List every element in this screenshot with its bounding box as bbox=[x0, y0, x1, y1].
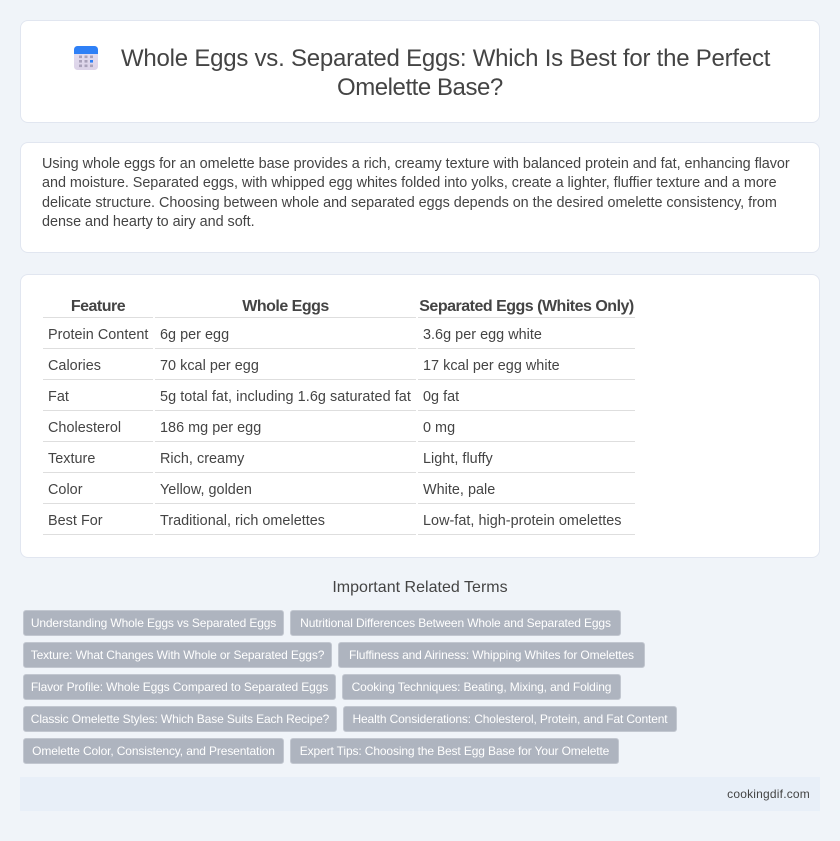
table row: color: White, pale bbox=[423, 482, 495, 498]
title bbox=[121, 45, 770, 101]
panel: header bbox=[20, 20, 820, 123]
table row: fat: Fat bbox=[48, 389, 69, 405]
title: Omelette Base? bbox=[337, 74, 503, 101]
text block: intro paragraph: Using whole eggs for an omelette base provides a rich, creamy texture with balanced protein and fat, enhancing flavor bbox=[42, 156, 790, 172]
table row: fat: 5g total fat, including 1.6g saturated fat bbox=[160, 389, 411, 405]
table row: calories bbox=[48, 358, 560, 374]
tag bbox=[23, 674, 336, 700]
table row: calories: 70 kcal per egg bbox=[160, 358, 259, 374]
tag: Expert Tips: Choosing the Best Egg Base for Your Omelette bbox=[300, 744, 609, 758]
title: Whole Eggs vs. Separated Eggs: Which Is Best for the Perfect bbox=[121, 45, 770, 72]
icon: calendar bbox=[74, 46, 98, 70]
table row: texture: Texture bbox=[48, 451, 95, 467]
table row: protein content bbox=[48, 327, 542, 343]
table row: color bbox=[48, 482, 495, 498]
table row: best for: Traditional, rich omelettes bbox=[160, 513, 325, 529]
table row: texture: Rich, creamy bbox=[160, 451, 244, 467]
text block: intro paragraph: delicate structure. Choosing between whole and separated eggs depends on the desired omelette consistency, from bbox=[42, 195, 777, 211]
table header: whole eggs: Whole Eggs bbox=[242, 298, 329, 315]
table row: cholesterol: Cholesterol bbox=[48, 420, 121, 436]
table row: cholesterol bbox=[48, 420, 455, 436]
table row: fat bbox=[48, 389, 460, 405]
table row: best for: Best For bbox=[48, 513, 103, 529]
tag bbox=[342, 674, 621, 700]
table header: separated eggs: Separated Eggs (Whites Only) bbox=[419, 298, 634, 315]
tag bbox=[23, 706, 337, 732]
heading: related terms: Important Related Terms bbox=[332, 579, 508, 596]
tag: Cooking Techniques: Beating, Mixing, and Folding bbox=[352, 680, 611, 694]
tag: Nutritional Differences Between Whole and Separated Eggs bbox=[300, 616, 611, 630]
tag bbox=[338, 642, 645, 668]
tag bbox=[290, 738, 619, 764]
tag bbox=[23, 642, 332, 668]
table row: calories: 17 kcal per egg white bbox=[423, 358, 560, 374]
table row: color: Color bbox=[48, 482, 83, 498]
text block: intro paragraph: dense and hearty to airy and soft. bbox=[42, 214, 255, 230]
panel: intro bbox=[20, 142, 820, 253]
table row: texture: Light, fluffy bbox=[423, 451, 493, 467]
text block: intro paragraph: and moisture. Separated eggs, with whipped egg whites folded into yolks, create a lighter, fluffier texture and a more bbox=[42, 175, 777, 191]
tag bbox=[343, 706, 677, 732]
table row: protein content: Protein Content bbox=[48, 327, 148, 343]
text block: intro paragraph bbox=[42, 156, 790, 230]
footer text: cookingdif.com bbox=[727, 787, 810, 801]
panel: comparison table bbox=[20, 274, 820, 558]
table row: cholesterol: 186 mg per egg bbox=[160, 420, 261, 436]
tag bbox=[290, 610, 621, 636]
table header: feature: Feature bbox=[71, 298, 125, 315]
tag bbox=[23, 610, 284, 636]
table row: best for: Low-fat, high-protein omelettes bbox=[423, 513, 622, 529]
tag: Health Considerations: Cholesterol, Protein, and Fat Content bbox=[352, 712, 668, 726]
tag: Texture: What Changes With Whole or Separated Eggs? bbox=[31, 648, 324, 662]
tag: Omelette Color, Consistency, and Presentation bbox=[32, 744, 275, 758]
tag: Classic Omelette Styles: Which Base Suits Each Recipe? bbox=[31, 712, 329, 726]
tag bbox=[23, 738, 284, 764]
table row: cholesterol: 0 mg bbox=[423, 420, 455, 436]
table row: fat: 0g fat bbox=[423, 389, 459, 405]
tag: Understanding Whole Eggs vs Separated Eggs bbox=[31, 616, 276, 630]
table row: protein content: 3.6g per egg white bbox=[423, 327, 542, 343]
tag: Fluffiness and Airiness: Whipping Whites for Omelettes bbox=[349, 648, 634, 662]
table row: protein content: 6g per egg bbox=[160, 327, 229, 343]
table row: color: Yellow, golden bbox=[160, 482, 252, 498]
tag: Flavor Profile: Whole Eggs Compared to Separated Eggs bbox=[31, 680, 328, 694]
table row: best for bbox=[48, 513, 622, 529]
table row: calories: Calories bbox=[48, 358, 101, 374]
footer bar bbox=[20, 777, 820, 811]
table row: texture bbox=[48, 451, 493, 467]
